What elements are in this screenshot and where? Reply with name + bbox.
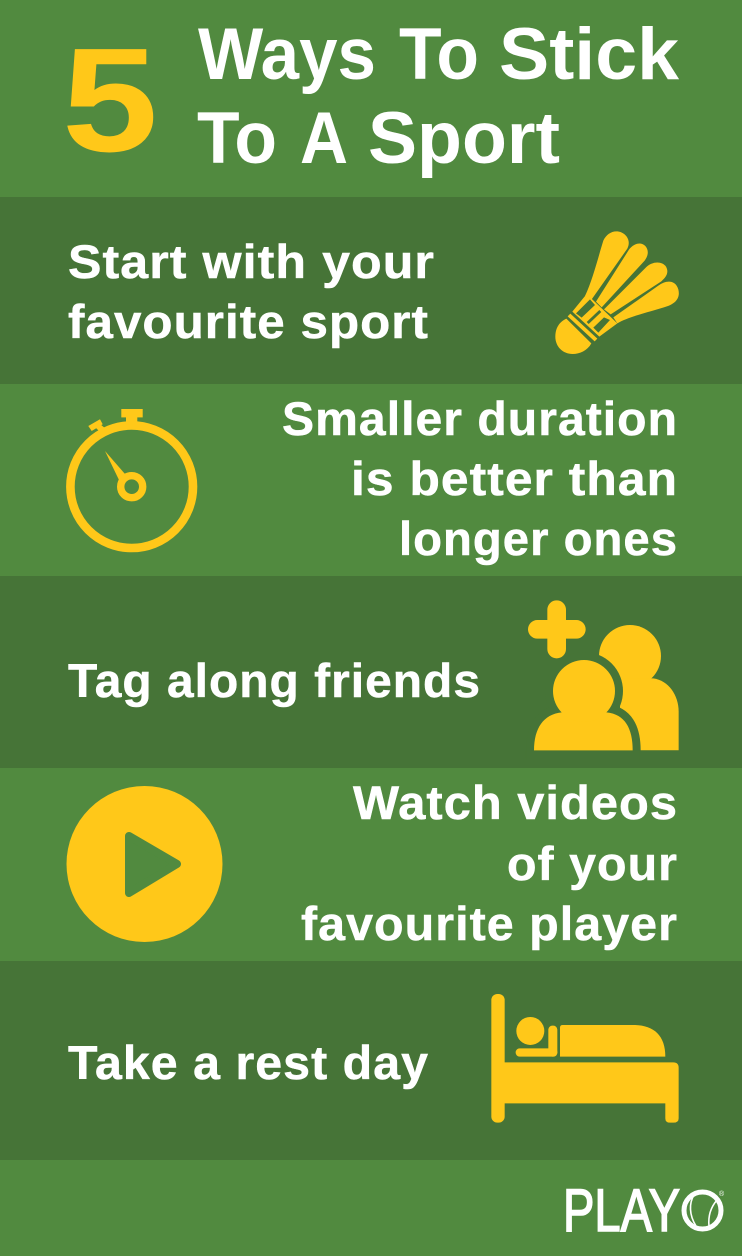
text: tag along friends: Tag along friends	[68, 654, 481, 707]
dome	[555, 319, 591, 354]
title: To	[197, 98, 277, 179]
icon: bed	[491, 994, 679, 1123]
title: A	[300, 98, 348, 179]
logo: Playo: ®	[719, 1190, 725, 1198]
text: start with your favourite sport: Start with your	[68, 235, 435, 288]
text: watch videos of your favourite player: favourite player	[301, 897, 678, 950]
icon: stopwatch	[70, 409, 193, 548]
text: watch videos of your favourite player: of your	[507, 837, 678, 890]
text: smaller duration is better than longer ones: is better than	[351, 452, 678, 505]
icon: play button	[66, 786, 222, 942]
logo ball	[684, 1192, 721, 1229]
text: watch videos of your favourite player	[301, 776, 678, 950]
text: smaller duration is better than longer ones: longer ones	[399, 512, 678, 565]
feathers	[585, 231, 629, 299]
logo: Playo: PLAY	[563, 1177, 680, 1244]
lattice frame	[572, 294, 617, 337]
strip	[568, 314, 597, 341]
text: take a rest day: Take a rest day	[68, 1036, 429, 1089]
title	[197, 14, 679, 179]
icon: friends with plus	[527, 600, 683, 760]
big number 5: 5	[62, 18, 158, 183]
title: Ways	[198, 14, 376, 95]
title: Sport	[368, 98, 560, 179]
title: To	[399, 14, 479, 95]
title: Stick	[499, 14, 679, 95]
band: start with your favourite sport	[0, 197, 742, 384]
band: take a rest day	[0, 961, 742, 1160]
icon: shuttlecock	[555, 231, 679, 354]
text: start with your favourite sport: favourite sport	[68, 295, 429, 348]
text: start with your favourite sport	[68, 235, 435, 348]
text: smaller duration is better than longer ones	[282, 392, 678, 565]
band: tag along friends	[0, 576, 742, 768]
text: watch videos of your favourite player: Watch videos	[353, 776, 678, 829]
text: smaller duration is better than longer ones: Smaller duration	[282, 392, 678, 445]
